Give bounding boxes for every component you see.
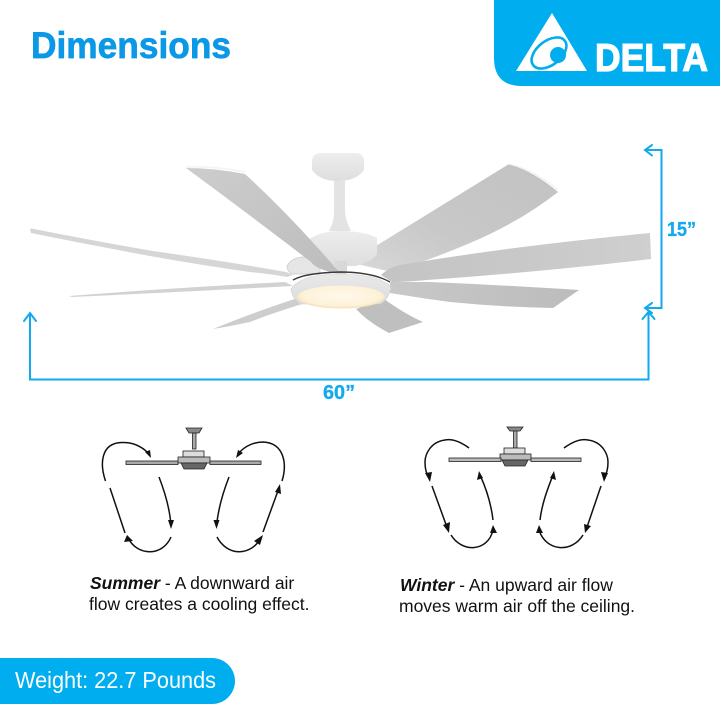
dimension line: width 60 inches (24, 311, 654, 380)
text block: winter: Winter (400, 575, 455, 595)
small fan icon (449, 427, 581, 466)
diagram: summer airflow (102, 428, 284, 552)
arrow: right up (642, 312, 654, 319)
fan blade: lower left thin (213, 298, 302, 329)
fan canopy (312, 153, 364, 181)
small fan icon (126, 428, 261, 469)
fan blade: far left thin (30, 228, 293, 277)
text block: summer: Summer (90, 573, 161, 593)
airflow arrows (425, 440, 608, 548)
text block: winter: moves warm air off the ceiling. (399, 596, 635, 616)
fan blade: right (381, 233, 651, 282)
fan blade: upper right (357, 164, 558, 272)
text block: winter: - An upward air flow (454, 575, 613, 595)
title: Dimensions (31, 25, 231, 66)
fan blade: lower right (390, 282, 579, 308)
small motor side bump (287, 257, 320, 274)
logo wordmark: DELTA (595, 37, 708, 80)
light glass (297, 286, 385, 308)
arrow: top left (645, 145, 652, 156)
fan blade: left thin (69, 282, 293, 297)
fan blade: upper left (186, 168, 340, 273)
label: 60 inches: 60” (323, 382, 355, 404)
motor housing (308, 231, 377, 266)
logo panel (494, 0, 720, 86)
dimension line: height 15 inches (645, 145, 662, 313)
arrow: left up (24, 313, 36, 321)
arrow: bottom left (645, 303, 652, 313)
text block: summer: - A downward air (160, 573, 294, 593)
label: 15 inches: 15” (667, 219, 696, 241)
dark trim line (293, 272, 390, 282)
weight badge: Weight: 22.7 Pounds (15, 667, 216, 693)
airflow arrows (102, 442, 284, 552)
text block: summer: flow creates a cooling effect. (89, 594, 310, 614)
ceiling fan illustration (30, 153, 651, 333)
icon: delta triangle (516, 13, 587, 75)
weight badge (0, 658, 235, 704)
fan blade: bottom (356, 299, 423, 333)
fan downrod (329, 181, 351, 231)
diagram: winter airflow (425, 427, 608, 548)
light ring body (291, 274, 391, 304)
